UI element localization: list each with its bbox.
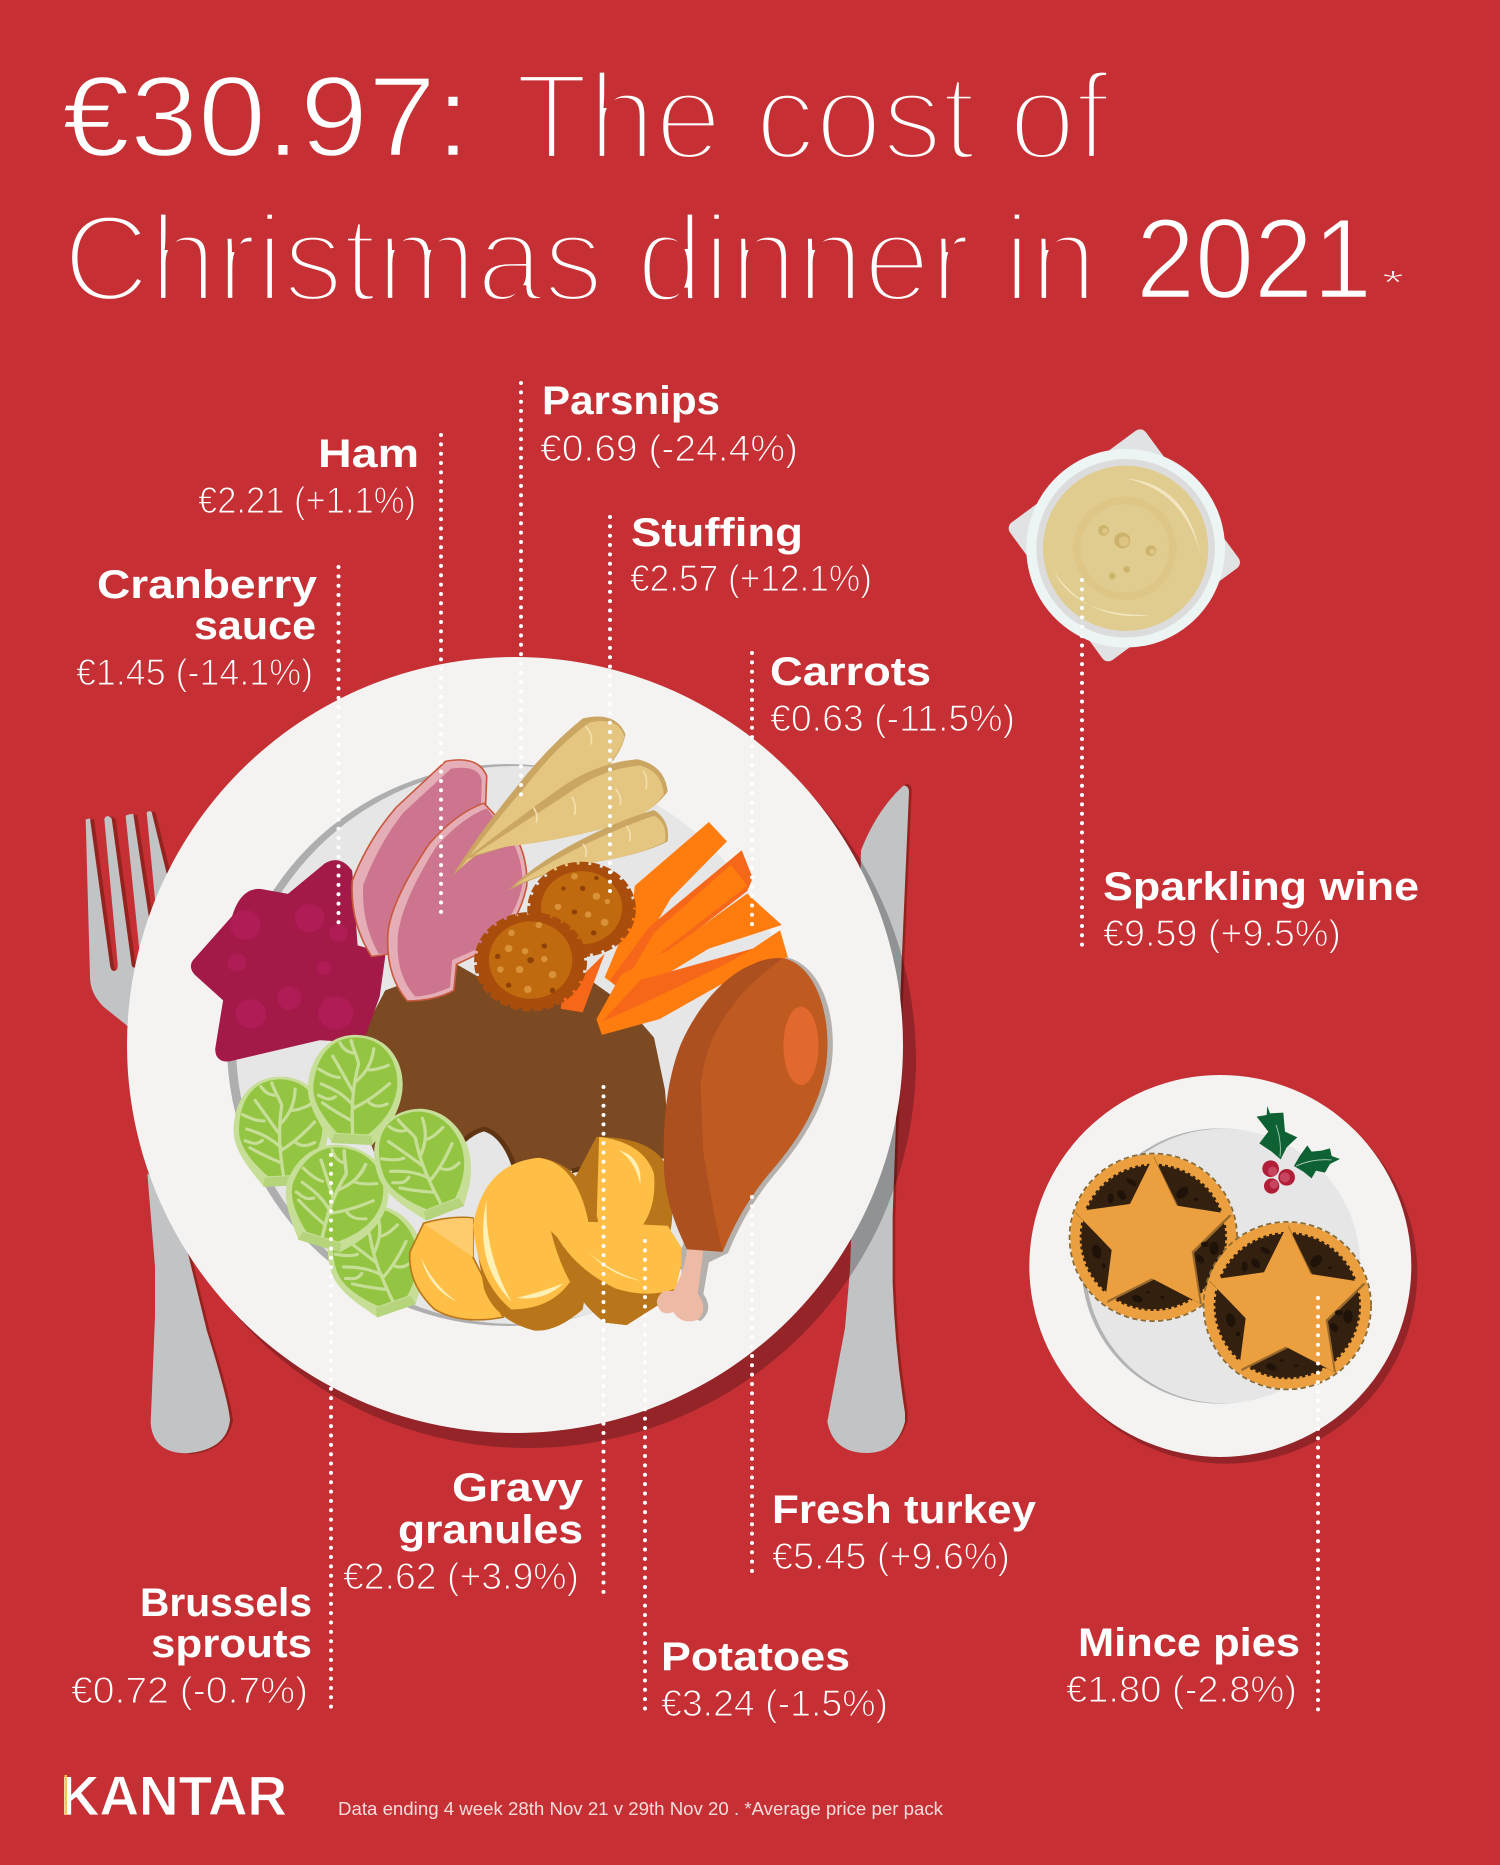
label: Parsnips: €0.69 (-24.4%) <box>540 428 798 469</box>
footnote: Data ending 4 week 28th Nov 21 v 29th Nov 20 . *Average price per pack <box>338 1799 944 1819</box>
label: Gravy granules <box>343 1087 604 1597</box>
sprouts <box>231 1033 489 1326</box>
stuffing <box>477 864 633 1009</box>
potatoes <box>410 1137 684 1331</box>
title: * <box>1382 264 1404 302</box>
holly <box>1257 1106 1340 1194</box>
carrots <box>561 822 788 1035</box>
title: Christmas dinner in <box>63 191 1097 328</box>
glass rim and wine <box>1026 449 1225 648</box>
title: €30.97: <box>62 54 470 181</box>
label: Cranberry sauce <box>76 563 338 925</box>
food on plate <box>195 716 833 1331</box>
label: Mince pies <box>1066 1298 1318 1713</box>
label: Brussels sprouts <box>71 1155 331 1711</box>
cranberry sauce <box>195 864 381 1057</box>
turkey leg <box>657 957 833 1321</box>
label: Mince pies: Mince pies <box>1078 1621 1300 1665</box>
label: Brussels sprouts: sprouts <box>151 1622 312 1666</box>
sparkling wine glass <box>1016 437 1233 654</box>
label: Fresh turkey <box>752 1197 1037 1577</box>
main plate <box>127 657 916 1448</box>
label: Cranberry sauce: Cranberry <box>97 563 318 607</box>
label: Stuffing: €2.57 (+12.1%) <box>630 558 872 599</box>
label: Potatoes: €3.24 (-1.5%) <box>661 1683 888 1724</box>
title: The cost of <box>515 49 1110 186</box>
mince pie <box>1070 1154 1237 1321</box>
mince pie second <box>1204 1222 1371 1389</box>
icon: knife <box>827 784 912 1453</box>
label: Potatoes: Potatoes <box>661 1635 850 1679</box>
label: Brussels sprouts: Brussels <box>140 1581 312 1625</box>
logo: Kantar: KANTAR <box>60 1764 287 1827</box>
icon: fork <box>86 811 233 1454</box>
title: 2021 <box>1136 196 1372 323</box>
gravy <box>358 964 670 1171</box>
title <box>62 49 1404 328</box>
label: Gravy granules: Gravy <box>452 1466 584 1510</box>
label: Carrots <box>752 650 1015 927</box>
label: Ham <box>198 432 441 915</box>
label: Ham: Ham <box>318 432 419 476</box>
napkin <box>1016 437 1233 654</box>
label: Gravy granules: granules <box>398 1508 583 1552</box>
parsnips <box>452 716 668 890</box>
label: Stuffing <box>610 511 872 894</box>
label: Ham: €2.21 (+1.1%) <box>198 480 416 521</box>
label: Parsnips: Parsnips <box>542 379 720 423</box>
label: Sparkling wine: Sparkling wine <box>1103 865 1419 909</box>
label: Fresh turkey: €5.45 (+9.6%) <box>772 1536 1010 1577</box>
mince pie plate <box>1029 1075 1417 1464</box>
label: Cranberry sauce: sauce <box>194 604 316 648</box>
label: Fresh turkey: Fresh turkey <box>772 1488 1037 1532</box>
label: Parsnips <box>521 379 798 797</box>
label: Stuffing: Stuffing <box>631 511 803 555</box>
label: Brussels sprouts: €0.72 (-0.7%) <box>71 1670 308 1711</box>
label: Carrots: Carrots <box>770 650 931 694</box>
label: Gravy granules: €2.62 (+3.9%) <box>343 1556 579 1597</box>
label: Cranberry sauce: €1.45 (-14.1%) <box>76 652 313 693</box>
label: Mince pies: €1.80 (-2.8%) <box>1066 1669 1297 1710</box>
label: Potatoes <box>645 1241 888 1724</box>
ham <box>352 760 527 1001</box>
label: Sparkling wine: €9.59 (+9.5%) <box>1103 913 1341 954</box>
label: Carrots: €0.63 (-11.5%) <box>770 698 1015 739</box>
label: Sparkling wine <box>1082 580 1419 954</box>
